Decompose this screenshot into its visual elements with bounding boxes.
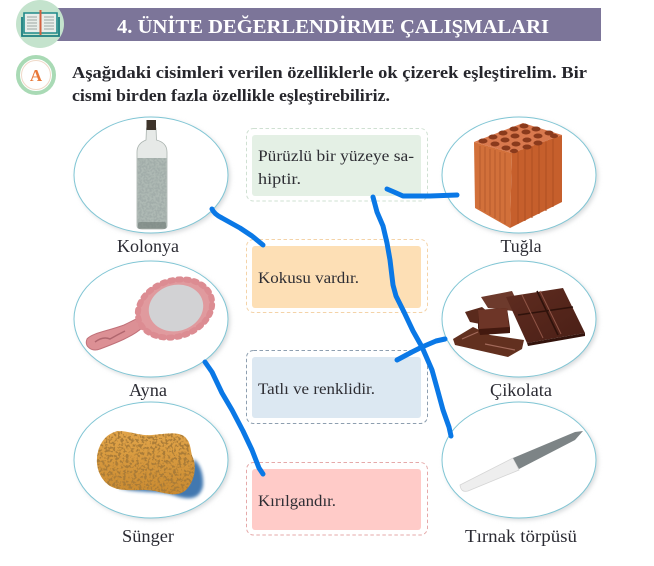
property box: Pürüzlü: hiptir. — [258, 171, 301, 188]
property box: Kırılgandır — [246, 462, 428, 535]
icon: glass bottle — [137, 120, 167, 229]
label: Sünger: Sünger — [122, 526, 174, 546]
property box: Pürüzlü — [246, 128, 428, 201]
icon: chocolate pieces — [453, 288, 585, 357]
label: Çikolata: Çikolata — [490, 380, 552, 400]
icon: open book — [16, 0, 64, 48]
property box: Pürüzlü: Pürüzlü bir yüzeye sa- — [258, 148, 414, 165]
object: Tuğla — [442, 117, 598, 256]
instruction text: cismi birden fazla özellikle eşleştirebiliriz. — [72, 86, 390, 105]
property box: Kokusu — [246, 240, 428, 312]
property box: Tatlı — [246, 350, 428, 424]
drawn line: Pürüzlü to Tuğla — [387, 189, 457, 196]
drawn line: Kolonya to Kokusu — [212, 209, 263, 245]
header bar — [50, 8, 601, 41]
label: Ayna: Ayna — [129, 380, 167, 400]
drawn line: Tatlı to Çikolata — [397, 339, 445, 360]
header title: 4. ÜNİTE DEĞERLENDİRME ÇALIŞMALARI — [117, 14, 549, 38]
instruction text — [72, 63, 587, 105]
property box: Kokusu: Kokusu vardır. — [258, 270, 359, 287]
icon: hand mirror — [86, 270, 220, 350]
label: Tuğla: Tuğla — [500, 236, 542, 256]
label: Tırnak törpüsü: Tırnak törpüsü — [465, 526, 577, 546]
object: Çikolata — [442, 261, 598, 400]
icon: sponge — [97, 431, 203, 498]
instruction text: Aşağıdaki cisimleri verilen özelliklerle ok çizerek eşleştirelim. Bir — [72, 63, 587, 82]
drawn line: Ayna to Kırılgandır — [205, 362, 263, 474]
icon: nail file — [460, 431, 583, 491]
object: Ayna — [74, 261, 230, 400]
property box: Kırılgandır: Kırılgandır. — [258, 493, 336, 510]
icon: brick — [474, 123, 562, 228]
object: Kolonya — [74, 117, 230, 256]
object: Sünger — [74, 402, 230, 546]
icon: section badge A — [18, 57, 54, 93]
drawn line: Pürüzlü to Tırnak törpüsü — [373, 197, 451, 436]
property box: Tatlı: Tatlı ve renklidir. — [258, 381, 375, 398]
label: Kolonya: Kolonya — [117, 236, 179, 256]
icon: section badge A: A — [30, 66, 43, 85]
object: Tırnak törpüsü — [442, 402, 598, 546]
